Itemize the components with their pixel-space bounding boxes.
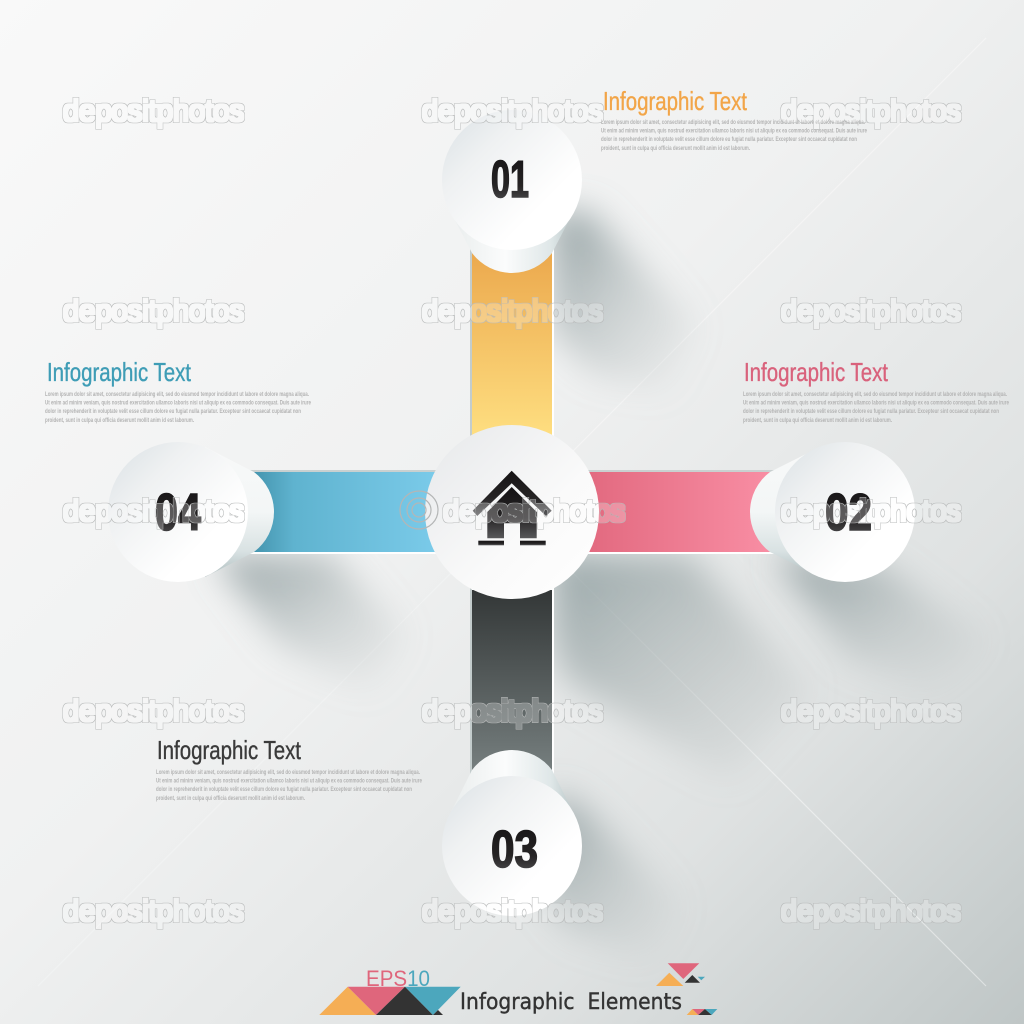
watermarks: depositphotos — [781, 693, 961, 728]
bar: dark grey — [472, 590, 552, 780]
disc 02 — [775, 442, 915, 582]
shadow: hub — [552, 554, 810, 780]
watermarks: depositphotos — [781, 893, 961, 928]
disc 03 — [442, 776, 582, 916]
body 02 — [743, 391, 1009, 424]
footer logo: upper small triangles — [656, 963, 705, 986]
watermarks: depositphotos — [422, 693, 603, 728]
watermarks: depositphotos — [422, 893, 603, 928]
cylinder 03 — [442, 750, 582, 916]
tube 01 — [447, 205, 577, 273]
bar: pink — [585, 472, 777, 552]
bar: yellow — [472, 240, 552, 435]
disc 04 — [108, 442, 248, 582]
heading 04: Infographic Text — [47, 357, 192, 387]
number 03: 03 — [491, 821, 538, 879]
watermarks: depositphotos — [63, 493, 244, 528]
watermarks: depositphotos — [781, 493, 961, 528]
number 02: 02 — [825, 484, 872, 542]
icon: watermark camera — [400, 491, 438, 529]
body 02: proident, sunt in culpa qui officia deserunt mollit anim id est laborum. — [743, 417, 892, 424]
text block 01 — [601, 86, 867, 152]
shadow: circle 01 — [552, 212, 695, 392]
watermarks: depositphotos — [63, 693, 244, 728]
heading 02: Infographic Text — [744, 357, 889, 387]
tube 03 — [447, 750, 577, 820]
cylinder 04 — [108, 442, 274, 582]
watermarks: depositphotos — [443, 493, 625, 528]
bar slots — [240, 240, 785, 785]
shadow: circle 04 — [215, 554, 405, 692]
body 01: dolor in reprehenderit in voluptate velit esse cillum dolore eu fugiat nulla pariatur. Excepteur sint occaecat cupidatat non — [601, 136, 857, 143]
body 01: Lorem ipsum dolor sit amet, consectetur adipisicing elit, sed do eiusmod tempor incididunt ut labore et dolore magna aliqua. — [601, 119, 865, 126]
heading 01: Infographic Text — [603, 86, 748, 116]
tube 02 — [750, 447, 820, 577]
text block 02 — [743, 357, 1009, 424]
body 01: proident, sunt in culpa qui officia deserunt mollit anim id est laborum. — [601, 145, 750, 152]
body 04: Ut enim ad minim veniam, quis nostrud exercitation ullamco laboris nisi ut aliquip ex ea commodo consequat. Duis aute irure — [45, 400, 311, 406]
central hub — [425, 425, 599, 599]
number 04: 04 — [155, 484, 201, 542]
footer logo: large triangles — [319, 987, 461, 1015]
body 04 — [45, 391, 311, 424]
body 04: dolor in reprehenderit in voluptate velit esse cillum dolore eu fugiat nulla pariatur. Excepteur sint occaecat cupidatat non — [45, 408, 301, 415]
shadow: circle 03 — [540, 790, 680, 960]
EPS10 label: EPS10 — [366, 966, 430, 991]
body 03 — [156, 769, 422, 802]
icon: house — [473, 471, 552, 545]
watermarks: depositphotos — [63, 893, 244, 928]
watermarks: depositphotos — [422, 93, 603, 128]
body 03: Lorem ipsum dolor sit amet, consectetur adipisicing elit, sed do eiusmod tempor incididunt ut labore et dolore magna aliqua. — [156, 769, 420, 776]
bar: blue — [245, 472, 440, 552]
body 03: dolor in reprehenderit in voluptate velit esse cillum dolore eu fugiat nulla pariatur. Excepteur sint occaecat cupidatat non — [156, 786, 412, 793]
body 01 — [601, 119, 867, 152]
body 03: proident, sunt in culpa qui officia deserunt mollit anim id est laborum. — [156, 795, 305, 802]
tube 04 — [205, 447, 274, 577]
number 01: 01 — [491, 151, 529, 209]
watermarks: depositphotos — [781, 293, 961, 328]
footer logo: lower small triangles — [687, 1009, 717, 1015]
body 04: proident, sunt in culpa qui officia deserunt mollit anim id est laborum. — [45, 417, 194, 424]
heading 03: Infographic Text — [157, 735, 302, 765]
watermarks: depositphotos — [63, 293, 244, 328]
shadow: circle 02 — [775, 556, 985, 690]
cylinder 01 — [442, 110, 582, 273]
watermarks: depositphotos — [781, 93, 961, 128]
watermarks: depositphotos — [63, 93, 244, 128]
disc 01 — [442, 110, 582, 250]
cylinder 02 — [750, 442, 915, 582]
body 04: Lorem ipsum dolor sit amet, consectetur adipisicing elit, sed do eiusmod tempor incididunt ut labore et dolore magna aliqua. — [45, 391, 309, 398]
body 03: Ut enim ad minim veniam, quis nostrud exercitation ullamco laboris nisi ut aliquip ex ea commodo consequat. Duis aute irure — [156, 778, 422, 784]
watermarks: depositphotos — [422, 293, 603, 328]
watermarks — [63, 93, 961, 928]
footer title: Infographic Elements — [460, 990, 682, 1015]
text block 03 — [156, 735, 422, 802]
body 01: Ut enim ad minim veniam, quis nostrud exercitation ullamco laboris nisi ut aliquip ex ea commodo consequat. Duis aute irure — [601, 128, 867, 134]
text block 04 — [45, 357, 311, 424]
